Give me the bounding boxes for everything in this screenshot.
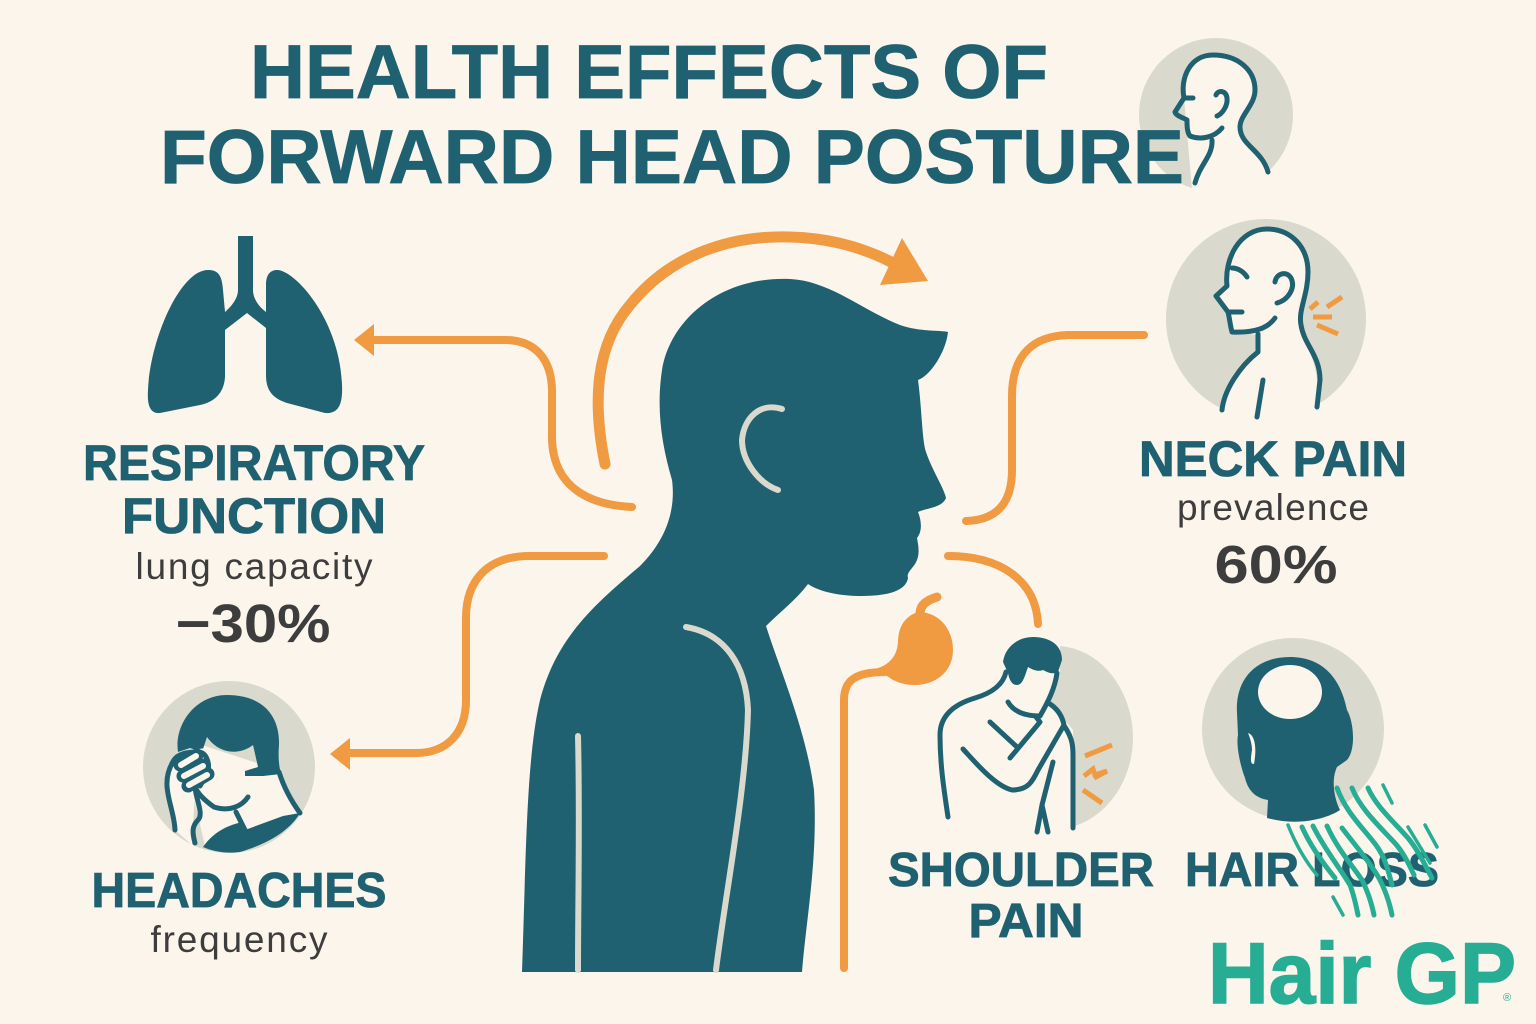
silhouette: head and torso — [522, 279, 948, 972]
title: FORWARD HEAD POSTURE — [160, 115, 1184, 200]
text: respiratory function: lung capacity — [136, 546, 373, 587]
text: headaches: HEADACHES — [92, 864, 386, 918]
logo: Hair GP: ® — [1503, 992, 1511, 1004]
arrow: to neck pain — [966, 335, 1144, 521]
text: neck pain: NECK PAIN — [1139, 431, 1407, 487]
arrow: to shoulder pain — [948, 556, 1038, 624]
text: headaches — [92, 864, 386, 960]
text: shoulder pain — [888, 844, 1154, 948]
back line — [575, 736, 582, 970]
icon: hair loss head — [1202, 638, 1384, 822]
icon: neck pain — [1166, 219, 1366, 421]
icon: lungs — [148, 236, 342, 413]
arrow: to lungs — [354, 324, 632, 507]
text: neck pain: 60% — [1214, 535, 1338, 595]
arrow and icon: stomach — [844, 597, 953, 968]
icon: headache — [143, 681, 315, 853]
title: HEALTH EFFECTS OF — [250, 30, 1048, 115]
icon: head outline top right — [1139, 38, 1293, 193]
title — [160, 30, 1184, 200]
arrow: forward curve — [598, 237, 928, 464]
text: headaches: frequency — [150, 919, 328, 960]
logo: Hair GP: Hair GP — [1208, 926, 1516, 1022]
spine line — [686, 627, 748, 970]
text: shoulder pain: SHOULDER — [888, 844, 1154, 897]
icon: falling hair strands — [1288, 785, 1437, 915]
icon: shoulder pain — [940, 637, 1133, 832]
text: shoulder pain: PAIN — [968, 895, 1084, 948]
text: respiratory function: RESPIRATORY — [83, 435, 425, 491]
text: respiratory function: FUNCTION — [122, 488, 386, 544]
text: respiratory function — [83, 435, 425, 654]
arrow: to headaches — [330, 556, 604, 770]
text: respiratory function: −30% — [176, 594, 330, 654]
ear line — [742, 407, 782, 490]
text: neck pain — [1139, 431, 1407, 595]
text: hair loss: HAIR LOSS — [1185, 844, 1439, 897]
text: neck pain: prevalence — [1177, 487, 1369, 528]
